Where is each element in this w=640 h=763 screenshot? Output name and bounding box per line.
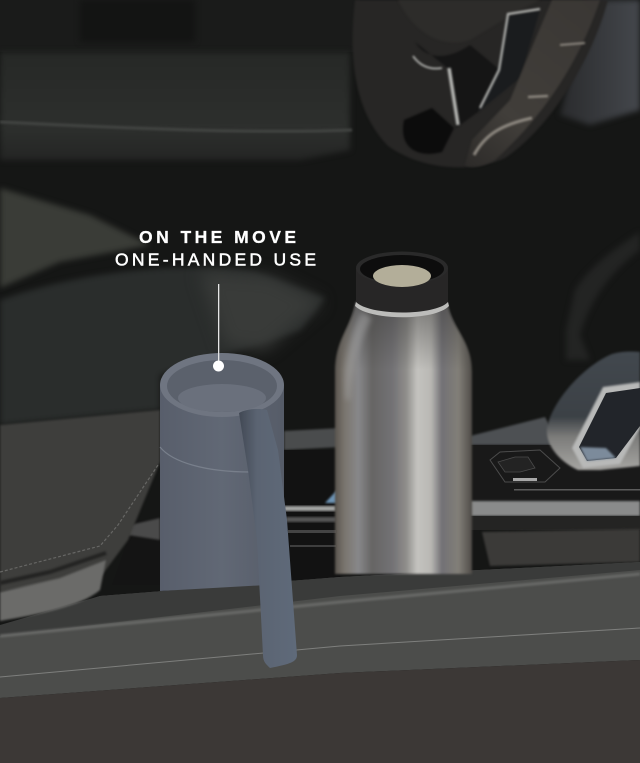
callout heading: ON THE MOVE bbox=[139, 227, 296, 247]
door panel bbox=[0, 0, 360, 160]
knob chrome window bbox=[572, 382, 640, 468]
bottle cap bbox=[356, 268, 448, 314]
steering wheel bbox=[353, 0, 608, 167]
mug strap bbox=[239, 409, 297, 668]
seat bbox=[0, 188, 325, 425]
callout pointer line bbox=[218, 284, 219, 364]
wheel highlights bbox=[474, 43, 585, 155]
front sill bbox=[0, 562, 640, 698]
seat cushion bbox=[0, 410, 160, 621]
mug bbox=[160, 353, 284, 591]
mug body bbox=[160, 385, 284, 591]
chrome trim bbox=[413, 9, 540, 125]
carpet bbox=[0, 660, 640, 763]
mug seam bbox=[160, 447, 250, 472]
gear knob bbox=[547, 352, 640, 470]
bottle bbox=[335, 252, 472, 574]
mug rim bbox=[160, 353, 284, 417]
callout dot bbox=[213, 360, 224, 372]
gear console panel bbox=[112, 417, 640, 585]
bottle body bbox=[335, 302, 472, 574]
gap left of mug bbox=[112, 520, 160, 585]
callout subheading: ONE-HANDED USE bbox=[115, 250, 316, 270]
callout: on the move bbox=[115, 227, 316, 372]
console recess bbox=[566, 232, 640, 360]
dashboard upper right bbox=[560, 0, 640, 125]
